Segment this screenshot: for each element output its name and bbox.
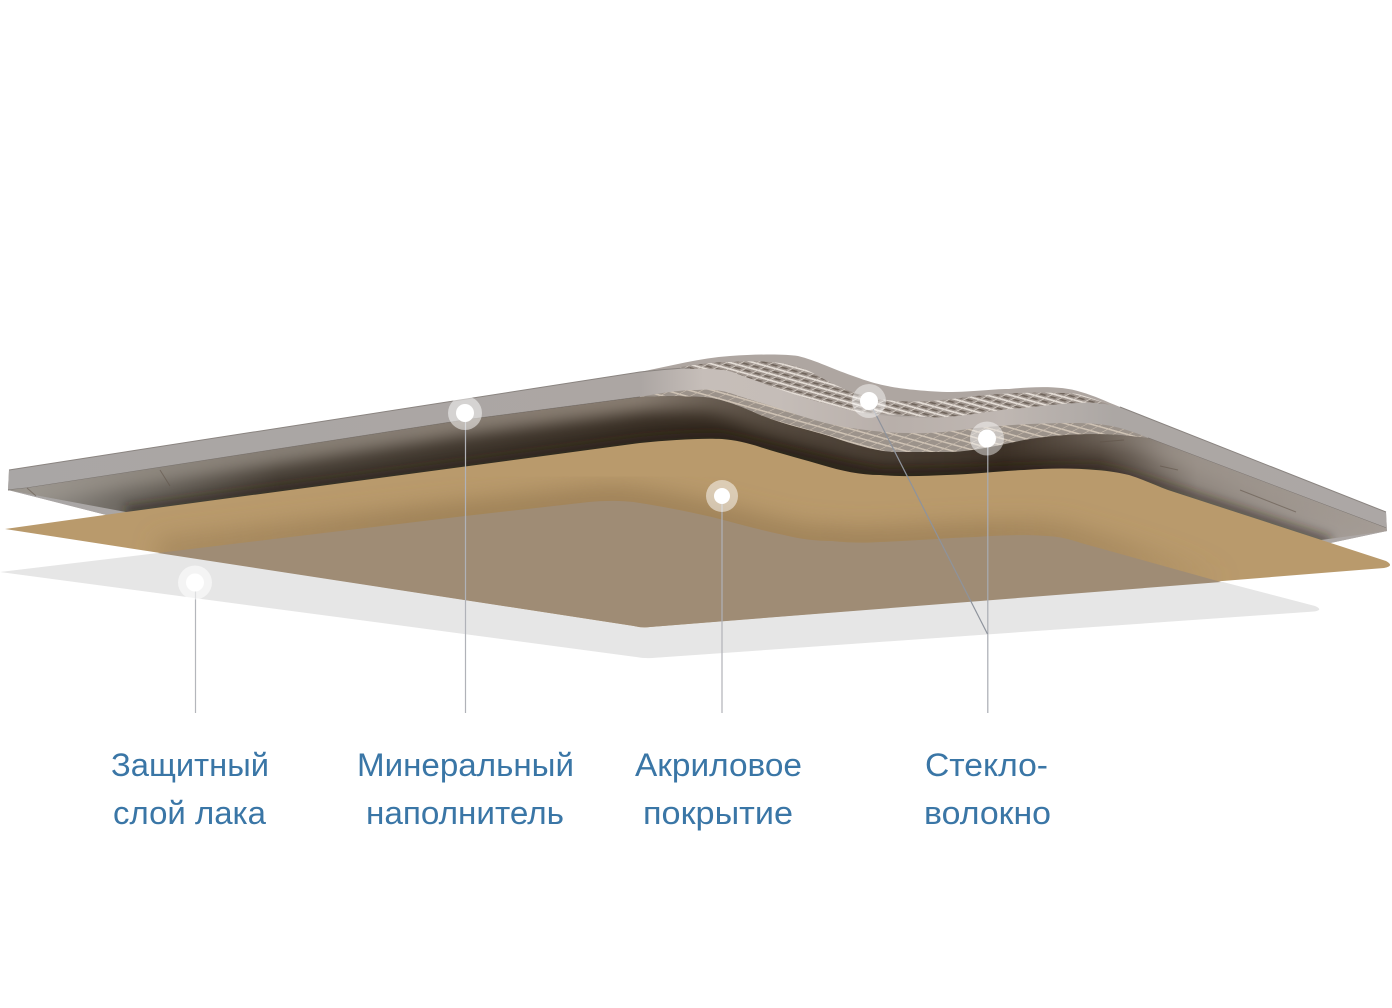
label: fibreglass: волокно: [924, 795, 1051, 831]
upper mesh: [680, 361, 1115, 430]
acrylic inner shading: [158, 501, 1220, 582]
layer: grey base shadow (protective lacquer): [0, 520, 1319, 658]
label: fibreglass: Стекло-: [925, 747, 1048, 783]
plate front band: [8, 369, 1387, 545]
plate edge lines: [9, 368, 1386, 512]
label: mineral filler: [357, 747, 574, 831]
label: acrylic coating: Акриловое: [635, 747, 802, 783]
layer: acrylic coating: [5, 439, 1390, 627]
marker: protective lacquer: [178, 566, 212, 600]
plate top surface: [8, 354, 1387, 545]
label: acrylic coating: [635, 747, 802, 831]
label: acrylic coating: покрытие: [643, 795, 793, 831]
leader line: mineral filler: [464, 420, 466, 713]
leader line: protective lacquer: [194, 590, 196, 713]
marker: fibreglass upper: [852, 384, 886, 418]
label: fibreglass: [924, 747, 1051, 831]
lower mesh: [640, 390, 1148, 470]
label: mineral filler: наполнитель: [366, 795, 564, 831]
leader line: fibreglass diagonal: [871, 405, 988, 634]
surface scratches: [27, 440, 1296, 512]
label: mineral filler: Минеральный: [357, 747, 574, 783]
leader line: acrylic coating: [721, 504, 723, 713]
overlap of acrylic and base layer: [158, 501, 1221, 627]
underside soft highlight: [8, 396, 1386, 543]
label: protective lacquer layer: Защитный: [111, 747, 269, 783]
label: protective lacquer layer: [111, 747, 269, 831]
marker: acrylic coating: [706, 480, 738, 512]
marker: fibreglass lower: [970, 422, 1004, 456]
marker: mineral filler: [448, 396, 482, 430]
leader line: fibreglass: [987, 446, 989, 713]
plate underside: [8, 396, 1387, 620]
label: protective lacquer layer: слой лака: [113, 795, 266, 831]
layer: fibreglass mineral plate: [8, 354, 1387, 543]
